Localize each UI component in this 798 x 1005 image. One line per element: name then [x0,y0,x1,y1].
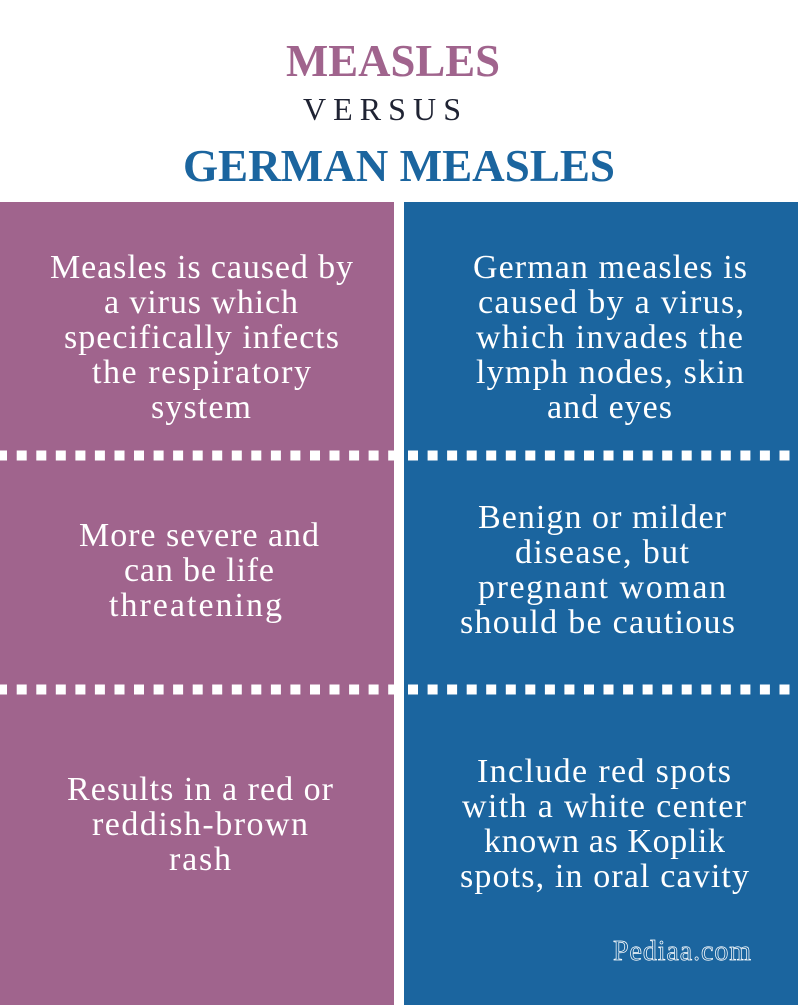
text: german measles severity: Benign or milder [478,499,727,536]
text: measles severity [79,517,319,624]
text: measles cause: a virus which [104,284,298,321]
text: measles cause [50,249,353,426]
text: measles severity: threatening [109,587,282,624]
text: german measles cause: German measles is [473,249,747,286]
text: measles cause: Measles is caused by [50,249,353,286]
text: german measles cause: and eyes [547,389,672,426]
text: german measles severity: disease, but [515,534,690,571]
panel: measles column [0,202,394,1005]
text: german measles cause [473,249,747,426]
logo: pediaa.com: Pediaa.com [613,936,751,967]
text: measles cause: specifically infects [64,319,339,356]
text: german measles spots: known as Koplik [484,823,725,860]
title: versus: VERSUS [303,91,461,127]
text: measles rash: reddish-brown [92,806,308,843]
text: german measles severity: should be cautious [460,604,735,641]
title: measles: MEASLES [286,35,500,86]
text: measles severity: can be life [124,552,274,589]
text: measles severity: More severe and [79,517,319,554]
text: german measles spots: spots, in oral cavity [460,858,749,895]
text: measles rash: rash [169,841,231,878]
text: german measles cause: caused by a virus, [478,284,744,321]
text: measles cause: the respiratory [92,354,311,391]
text: german measles cause: which invades the [476,319,743,356]
divider: first row [0,450,790,460]
text: german measles spots: with a white center [462,788,747,825]
text: measles rash [67,771,334,878]
text: german measles severity [460,499,735,641]
panel: german measles column [404,202,798,1005]
title: german measles: GERMAN MEASLES [183,140,615,191]
text: measles cause: system [151,389,251,426]
text: german measles spots: Include red spots [477,753,731,790]
divider: second row [0,684,790,694]
text: measles rash: Results in a red or [67,771,334,808]
text: german measles spots [460,753,749,895]
text: german measles cause: lymph nodes, skin [476,354,744,391]
text: german measles severity: pregnant woman [478,569,726,606]
